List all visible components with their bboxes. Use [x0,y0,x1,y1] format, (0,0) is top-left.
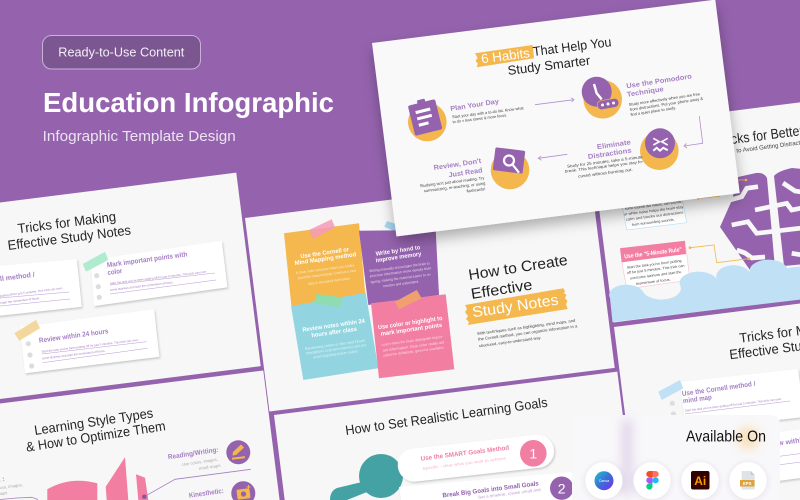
slide title: Learning Style Types [33,405,154,438]
sticky note: write by hand: Writing manually encourages the brain to [369,261,430,273]
callout: 5-minute rule: off for just 5 minutes. This trick can [627,264,685,275]
sticky note: cornell: idea to structured summaries [308,277,350,286]
icon: eps file: EPS [743,481,752,486]
step: review, don't just read: Review, Don't [433,158,482,172]
card: review within 24 hours: Review within 24 hours [39,328,109,345]
step: pomodoro technique: Use the Pomodoro [626,73,692,90]
callout: white noise: from surrounding sounds. [632,218,675,227]
sticky note: cornell: A clear note structure helps you under- [296,263,356,275]
step: plan your day: Start your day with a to-do list. Know what [452,105,525,119]
arrow: eliminate to review [538,154,567,160]
sticky note: write by hand: improve memory [375,251,422,264]
sticky note: colour highlight: ant information. Blue color really aid [382,340,444,353]
label: reading/writing [168,447,221,471]
step: pomodoro technique: Technique [627,86,664,99]
step: pomodoro technique: from distractions. Put your phone away & [629,96,704,112]
slide title: Effective Study Notes [7,223,132,253]
slide: how to set realistic learning goals [274,372,634,500]
card: cornell method: mind map [683,394,712,405]
callout: 5-minute rule: momentum of focus. [636,278,671,286]
sticky note: cornell [284,219,366,312]
sticky note: write by hand: process information more deeply than [370,266,432,278]
icon: canva [586,462,622,499]
icon: eps file [730,462,766,499]
icon: frustrated face [640,128,679,170]
goal 1 pill: Specific - clear what you want to achieve [422,455,507,471]
main heading: Education Infographic [43,87,334,118]
cloud illustration [609,260,800,322]
label: reading/writing: Use colors, images, [182,457,218,467]
step: review, don't just read [419,158,486,193]
step: pomodoro technique [626,73,704,117]
step: review, don't just read: summarizing, re-teaching, or using [423,181,486,193]
sticky note: review notes [291,293,378,380]
icon: clipboard [407,96,447,141]
description: With techniques such as highlighting, mind maps, and [477,318,576,336]
slide heading [467,252,569,303]
step: plan your day: Plan Your Day [450,98,500,113]
card: mark important points: color [107,268,123,277]
step: plan your day: to do = less stress & more focus. [452,112,507,124]
card: cornell method: Use the Cornell method / [682,381,756,398]
sticky note: write by hand [359,221,439,305]
step: review, don't just read: Just Read [448,167,483,179]
slide title [480,34,612,78]
sticky note: write by hand: Write by hand to [375,245,421,258]
header: banner copy [42,36,334,145]
step: plan your day [450,98,525,124]
panel: available on [572,415,780,500]
card: review within 24 hours [14,309,159,373]
icon: adobe illustrator: Ai [694,474,706,488]
step: pomodoro technique: find a quiet place to study. [630,105,676,117]
slide title: That Help You [532,34,612,59]
connector lines [0,469,251,500]
sticky note: colour highlight: Use color or highlight to [378,316,443,331]
sticky note: write by hand: typing, making the material easier to re- [370,272,432,284]
panel heading: Available On [686,429,766,446]
card: review within 24 hours [759,428,800,482]
callout: white noise: calm and blocks out distractions [626,210,684,222]
card: cornell method [0,259,82,320]
callout: 5-minute rule [620,241,690,289]
card: mark important points: come laziness and start the momentum of focus. [110,280,174,292]
slide heading: Effective [470,276,534,303]
step: review, don't just read: Studying isn't just about reading. Try [419,175,485,188]
sticky note: review notes: Review notes within 24 [302,319,366,334]
goal 1 pill: 1 [529,446,537,462]
goal 1 pill [396,433,556,483]
slide: 6 habits that help you study smarter [372,0,740,236]
icon: canva: Canva [599,479,609,483]
decorative glow, orange [737,427,759,449]
sticky note: review notes: avoid forgetting before exams. [313,349,359,359]
slide title: Study Smarter [507,53,592,78]
card: cornell method: Start the task you've been putting off for just 5 minutes. This trick can over- [685,397,782,413]
step: eliminate distractions: break. This technique helps you stay fo- [564,159,644,174]
goal 2 pill: Break Big Goals into Small Goals [442,480,540,499]
step: eliminate distractions: cused without burning out. [578,167,633,179]
callout: white noise: or white noise helps the brain stay [624,205,684,216]
card: mark important points [83,241,227,306]
callout: white noise: some sounds like nature, rain sounds, [625,200,683,211]
card: review within 24 hours: Start the task you've been putting off for just 5 minutes. This trick can over- [41,338,139,354]
slide: tricks for making effective study notes (left) [0,173,261,409]
label: left style, partly off the page [0,476,23,498]
icon: camera [231,481,255,500]
callout: white noise [622,197,687,230]
slide title: How to Set Realistic Learning Goals [344,395,549,438]
card: review within 24 hours: come laziness and start the momentum of focus. [42,349,106,360]
callout: 5-minute rule: Use the "5-Minute Rule" [624,247,682,260]
description [477,318,578,348]
title highlight: 6 habits [475,45,534,67]
label: reading/writing: mind maps [198,463,221,471]
sub heading: Infographic Template Design [43,128,236,145]
goal 2 pill: Set a timeline, create small and [478,487,541,500]
label: reading/writing: Reading/Writing: [168,447,219,461]
slide title: 6 Habits [480,45,531,66]
slide: tricks for better focus (brain) [589,79,800,322]
card: cornell method [658,369,800,430]
badge: ready-to-use content [42,36,200,69]
step: pomodoro technique: Study more effectively when you are free [628,91,701,107]
sticky note: review notes: strengthens long-term memory and you [306,343,367,355]
sticky note: review notes: hours after class [311,327,358,339]
step: eliminate distractions: Study for 25 minutes, take a 5-minute [567,154,644,169]
icon: magnifier [491,147,529,189]
icon: pomodoro timer [582,77,622,119]
badge: ready-to-use content: Ready-to-Use Content [58,45,185,60]
sticky note: cornell: Mind Mapping method [294,252,357,267]
sticky note: colour highlight [371,290,454,378]
step: eliminate distractions: Distractions [588,148,632,161]
icon: pencil [226,440,250,464]
slide: tricks for making study notes (lower right) [614,302,800,500]
slide: how to create effective study notes [245,174,615,411]
slide heading: How to Create [467,252,569,284]
sticky note: cornell: stand the material faster. Connect a new [297,269,357,280]
sticky note: review notes: Reviewing notes in the next hours [305,339,366,351]
highlight: study notes [465,288,568,325]
arrow: pomodoro to eliminate [684,116,703,148]
connector: yellow leader lines [689,179,750,263]
target head and handle [330,454,403,500]
sticky note: colour highlight: Learn when the brain distinguish import- [381,335,444,347]
chart: pink book shape [47,457,148,500]
description: the Cornell method, you can organize information in a [478,323,578,342]
sticky note: colour highlight: yellow for definitions, green for examples [383,346,444,358]
highlight: study notes: Study Notes [471,292,560,321]
step: eliminate distractions [564,139,644,179]
callout: 5-minute rule: Start the task you've been putting [627,259,682,270]
slide: learning style types [0,370,280,500]
step: eliminate distractions: Eliminate [597,139,631,151]
icon: figma [634,462,670,499]
icon: adobe illustrator [682,462,718,499]
step: review, don't just read: flashcards! [466,186,486,193]
goal 2 pill: 2 [558,480,566,496]
arrow: plan to pomodoro [535,98,574,105]
callout: 5-minute rule: overcome laziness and start the [630,270,682,280]
sticky note: colour highlight: mark important points [380,323,443,338]
goal 1 pill: Use the SMART Goals Method [420,445,510,463]
card: mark important points: Start the task you've been putting off for just 5 minutes. This trick can over- [110,270,207,285]
decorative glow, lilac [622,420,632,495]
slide title: & How to Optimize Them [25,418,166,455]
slide title [7,209,132,253]
description: structured, easy-to-understand way. [478,335,542,348]
card: mark important points: Mark important points with [107,251,188,269]
label: kinesthetic: Kinesthetic: [189,488,224,500]
goal 2 pill [399,472,585,500]
sticky note: write by hand: member and understand. [383,280,419,288]
slide title: Tricks for Making [17,209,117,236]
brain illustration [720,168,800,273]
sticky note: cornell: Use the Cornell or [300,247,350,260]
